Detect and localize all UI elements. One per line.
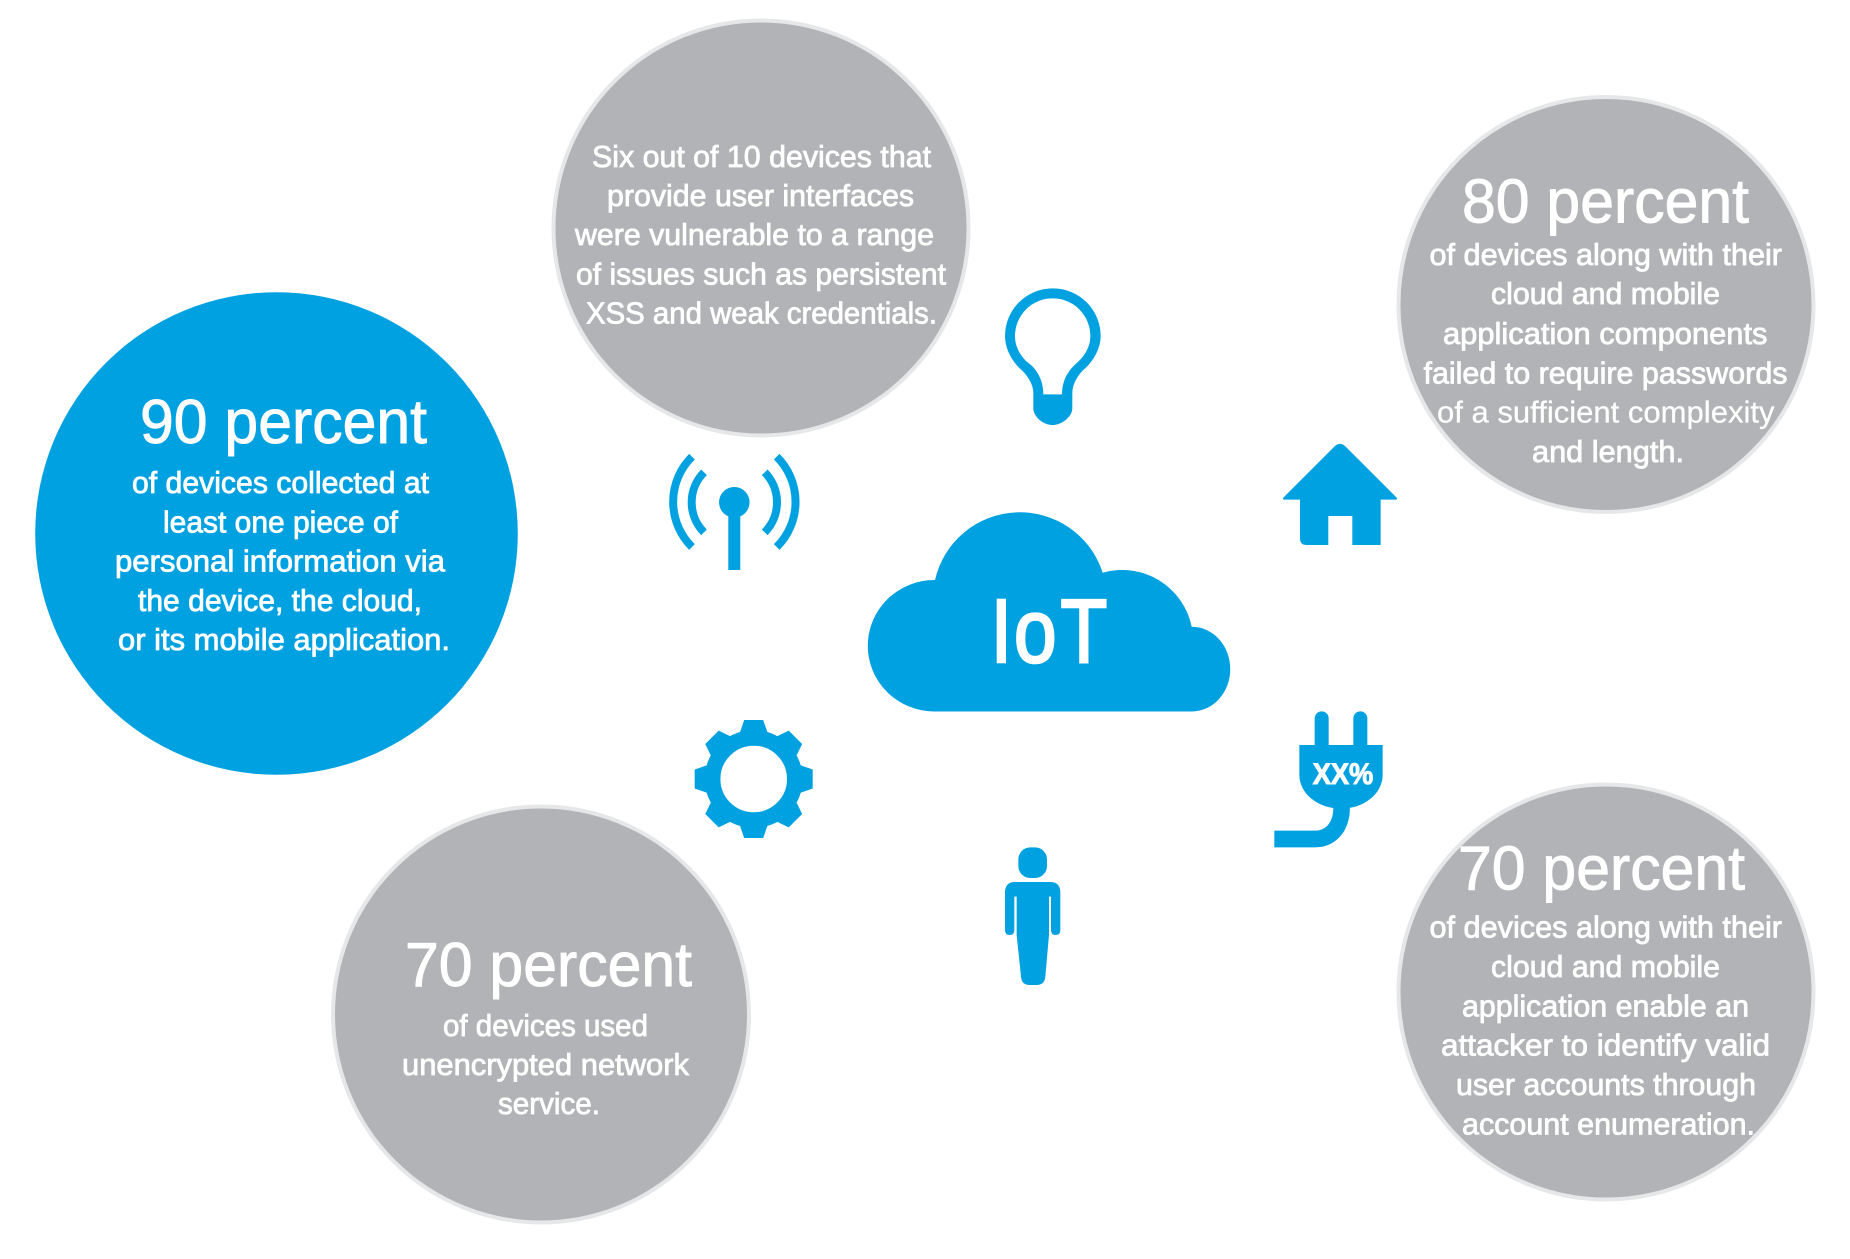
icon: gear (695, 720, 813, 838)
body text: were vulnerable to a range (574, 217, 934, 252)
body text: provide user interfaces (607, 178, 914, 213)
body text: of issues such as persistent (576, 256, 946, 292)
body text: application components (1443, 316, 1768, 351)
central cloud (868, 512, 1230, 712)
body text: Six out of 10 devices that (592, 139, 931, 174)
body text: of devices used (443, 1008, 648, 1043)
body text: failed to require passwords (1424, 356, 1788, 390)
icon: antenna (673, 457, 796, 570)
panel: 70 percent account enumeration (1398, 784, 1814, 1200)
blue circle (35, 292, 518, 775)
body text: personal information via (115, 544, 446, 578)
body text: attacker to identify valid (1441, 1028, 1770, 1062)
body text: cloud and mobile (1491, 949, 1720, 984)
grey circle (1398, 784, 1814, 1200)
body text: cloud and mobile (1491, 276, 1720, 311)
panel: 80 percent (1398, 97, 1814, 512)
icon: light bulb (1005, 288, 1101, 425)
body text: least one piece of (163, 504, 398, 540)
plug label: XX% (1313, 758, 1373, 791)
body text: and length. (1532, 434, 1684, 469)
panel: 70 percent unencrypted (333, 806, 749, 1222)
body text (115, 465, 450, 657)
heading: 80 percent: 80 percent (1462, 168, 1749, 236)
cloud shape (868, 512, 1230, 712)
body text: of devices collected at (132, 465, 429, 500)
panel: 90 percent (35, 292, 518, 775)
body text: or its mobile application. (118, 622, 450, 657)
body text: user accounts through (1456, 1067, 1756, 1102)
cloud label: IoT: IoT (991, 580, 1107, 681)
body text: service. (498, 1086, 600, 1121)
body text: XSS and weak credentials. (586, 296, 937, 330)
heading: 70 percent: 70 percent (405, 931, 692, 1000)
body text (574, 139, 946, 330)
grey circle (333, 806, 749, 1222)
body text (402, 1008, 689, 1121)
body text: unencrypted network (402, 1047, 689, 1082)
body text: application enable an (1462, 988, 1749, 1024)
body text: of devices along with their (1430, 237, 1782, 272)
icon: house (1283, 444, 1397, 545)
body text: of a sufficient complexity (1437, 394, 1775, 430)
body text (1424, 237, 1788, 469)
body text: account enumeration. (1462, 1106, 1755, 1142)
body text (1430, 910, 1782, 1142)
icon: plug with XX% (1274, 711, 1383, 839)
icon: person (1005, 847, 1060, 985)
heading: 90 percent: 90 percent (140, 388, 427, 457)
grey circle (1398, 97, 1814, 512)
panel: six out of 10 (554, 20, 968, 436)
body text: the device, the cloud, (138, 583, 422, 618)
heading: 70 percent: 70 percent (1458, 834, 1745, 904)
grey circle (554, 20, 968, 436)
body text: of devices along with their (1430, 910, 1782, 944)
